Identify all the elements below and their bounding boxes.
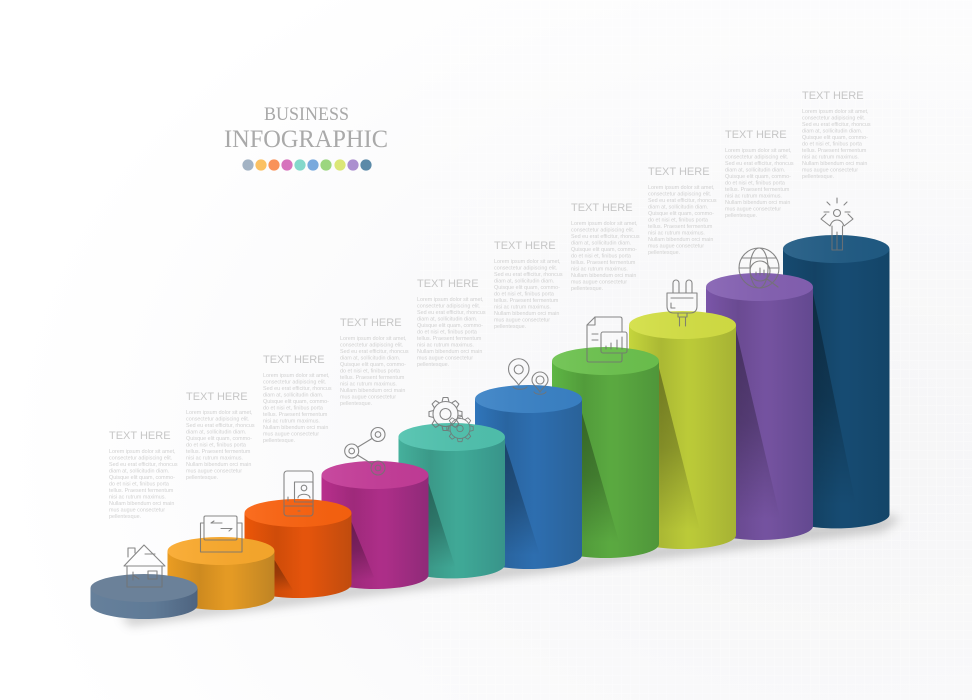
text block 1: mus augue consectetur [109,508,165,514]
text block 9: consectetur adipiscing elit. [725,154,788,160]
text block 8 [648,166,717,256]
text block 7: mus augue consectetur [571,280,627,286]
text block 4: mus augue consectetur [340,394,396,400]
text block 8: Lorem ipsum dolor sit amet, [648,185,715,191]
text block 10: nisi ac rutrum maximus. [802,154,859,160]
text block 1 [109,430,178,520]
text block 2 [186,391,255,481]
text block 4: TEXT HERE [340,317,402,329]
icon: globe with magnifier [739,248,779,288]
text block 2: Sed eu erat efficitur, rhoncus [186,423,255,429]
text block 7 [571,202,640,292]
text block 2: diam at, sollicitudin diam. [186,430,246,436]
ground shadow [120,515,901,626]
text block 4: consectetur adipiscing elit. [340,342,403,348]
text block 6: tellus. Praesent fermentum [494,298,559,304]
text block 2: TEXT HERE [186,391,248,403]
text block 8: Quisque elit quam, commo- [648,211,714,217]
text block 10: TEXT HERE [802,90,864,102]
title: business infographic: BUSINESS [264,105,349,125]
text block 4: pellentesque. [340,401,372,407]
text block 8: mus augue consectetur [648,244,704,250]
text block 7: Lorem ipsum dolor sit amet, [571,221,638,227]
text block 10: Lorem ipsum dolor sit amet, [802,109,869,115]
icon: document chart [587,317,627,362]
text block 7: TEXT HERE [571,202,633,214]
title: business infographic [224,105,388,153]
text block 3: pellentesque. [263,438,295,444]
text block 9: mus augue consectetur [725,206,781,212]
text block 5: nisi ac rutrum maximus. [417,342,474,348]
text block 4 [340,317,409,407]
text block 5: Lorem ipsum dolor sit amet, [417,297,484,303]
text block 3: nisi ac rutrum maximus. [263,418,320,424]
text block 9: pellentesque. [725,213,757,219]
text block 5: Quisque elit quam, commo- [417,323,483,329]
text block 5: do et nisi et, finibus porta [417,330,477,336]
text block 4: Lorem ipsum dolor sit amet, [340,336,407,342]
text block 2: tellus. Praesent fermentum [186,449,251,455]
cylinder 10: navy [783,235,890,528]
text block 2: Quisque elit quam, commo- [186,436,252,442]
text block 6: Nullam bibendum orci main [494,311,559,317]
text block 10: do et nisi et, finibus porta [802,142,862,148]
icon: map pins [508,359,548,394]
text block 2: pellentesque. [186,475,218,481]
text block 9: diam at, sollicitudin diam. [725,168,785,174]
cylinder 8: lime [629,311,736,549]
text block 5: consectetur adipiscing elit. [417,304,480,310]
text block 2: do et nisi et, finibus porta [186,442,246,448]
text block 7: diam at, sollicitudin diam. [571,240,631,246]
text block 1: consectetur adipiscing elit. [109,456,172,462]
text block 9 [725,129,794,219]
cylinder 6: blue [475,385,582,569]
text block 9: Nullam bibendum orci main [725,200,790,206]
text block 4: Quisque elit quam, commo- [340,362,406,368]
text block 3: Lorem ipsum dolor sit amet, [263,373,330,379]
text block 10 [802,90,871,180]
text block 8: TEXT HERE [648,166,710,178]
text block 7: do et nisi et, finibus porta [571,254,631,260]
text block 7: consectetur adipiscing elit. [571,228,634,234]
text block 4: tellus. Praesent fermentum [340,375,405,381]
text block 3 [263,354,332,444]
text block 7: Sed eu erat efficitur, rhoncus [571,234,640,240]
text block 1: nisi ac rutrum maximus. [109,494,166,500]
text block 4: do et nisi et, finibus porta [340,368,400,374]
text block 5: Sed eu erat efficitur, rhoncus [417,310,486,316]
text block 10: Nullam bibendum orci main [802,161,867,167]
text block 2: mus augue consectetur [186,468,242,474]
text block 8: Nullam bibendum orci main [648,237,713,243]
text block 3: Nullam bibendum orci main [263,425,328,431]
text block 10: diam at, sollicitudin diam. [802,128,862,134]
text block 10: consectetur adipiscing elit. [802,116,865,122]
cylinder 3: orange [244,499,352,598]
text block 1: tellus. Praesent fermentum [109,488,174,494]
text block 3: consectetur adipiscing elit. [263,380,326,386]
text block 8: Sed eu erat efficitur, rhoncus [648,198,717,204]
icon: gears [429,398,473,442]
text block 10: Sed eu erat efficitur, rhoncus [802,122,871,128]
text block 5: mus augue consectetur [417,356,473,362]
text block 7: nisi ac rutrum maximus. [571,266,628,272]
text block 6: nisi ac rutrum maximus. [494,304,551,310]
text block 9: tellus. Praesent fermentum [725,187,790,193]
icon: house [124,545,165,587]
text block 2: consectetur adipiscing elit. [186,416,249,422]
text block 7: tellus. Praesent fermentum [571,260,636,266]
text block 1: Quisque elit quam, commo- [109,475,175,481]
text block 7: Quisque elit quam, commo- [571,247,637,253]
text block 5: Nullam bibendum orci main [417,349,482,355]
text block 1: Nullam bibendum orci main [109,501,174,507]
cylinder 1: slate [90,574,198,619]
text block 6: mus augue consectetur [494,318,550,324]
text block 8: tellus. Praesent fermentum [648,224,713,230]
text block 6 [494,240,563,330]
text block 8: pellentesque. [648,250,680,256]
text block 1: Sed eu erat efficitur, rhoncus [109,462,178,468]
text block 1: do et nisi et, finibus porta [109,482,169,488]
text block 4: diam at, sollicitudin diam. [340,356,400,362]
text block 4: Nullam bibendum orci main [340,388,405,394]
cylinder 7: green [552,347,659,558]
text block 6: Sed eu erat efficitur, rhoncus [494,272,563,278]
text block 5: TEXT HERE [417,278,479,290]
text block 5: tellus. Praesent fermentum [417,336,482,342]
text block 2: nisi ac rutrum maximus. [186,456,243,462]
text block 10: mus augue consectetur [802,168,858,174]
text block 6: diam at, sollicitudin diam. [494,278,554,284]
text block 6: pellentesque. [494,324,526,330]
icon: plug [667,280,697,326]
text block 4: nisi ac rutrum maximus. [340,382,397,388]
icon: cards with arrows [200,516,242,552]
colour dots [242,159,372,171]
text block 5: pellentesque. [417,362,449,368]
text block 10: tellus. Praesent fermentum [802,148,867,154]
text block 9: Quisque elit quam, commo- [725,174,791,180]
text block 4: Sed eu erat efficitur, rhoncus [340,349,409,355]
text block 6: do et nisi et, finibus porta [494,292,554,298]
cylinder 2: amber [168,537,274,610]
text block 6: consectetur adipiscing elit. [494,266,557,272]
text block 9: Sed eu erat efficitur, rhoncus [725,161,794,167]
text block 3: Quisque elit quam, commo- [263,399,329,405]
text block 6: TEXT HERE [494,240,556,252]
text block 3: Sed eu erat efficitur, rhoncus [263,386,332,392]
text block 8: consectetur adipiscing elit. [648,192,711,198]
text block 2: Lorem ipsum dolor sit amet, [186,410,253,416]
text block 3: TEXT HERE [263,354,325,366]
icon: share nodes [345,428,385,475]
text block 1: diam at, sollicitudin diam. [109,468,169,474]
text block 10: Quisque elit quam, commo- [802,135,868,141]
text block 6: Lorem ipsum dolor sit amet, [494,259,561,265]
text block 8: diam at, sollicitudin diam. [648,204,708,210]
text block 8: do et nisi et, finibus porta [648,218,708,224]
icon: phone profile [284,471,313,516]
cylinder 9: purple [706,273,813,540]
text block 7: pellentesque. [571,286,603,292]
text block 6: Quisque elit quam, commo- [494,285,560,291]
icon: person with raised arms [821,198,853,250]
text block 5 [417,278,486,368]
text block 1: TEXT HERE [109,430,171,442]
text block 8: nisi ac rutrum maximus. [648,230,705,236]
text block 1: Lorem ipsum dolor sit amet, [109,449,176,455]
text block 1: pellentesque. [109,514,141,520]
cylinder 4: magenta [322,461,428,589]
text block 2: Nullam bibendum orci main [186,462,251,468]
cylinder 5: teal [398,423,505,578]
text block 9: TEXT HERE [725,129,787,141]
text block 9: Lorem ipsum dolor sit amet, [725,148,792,154]
text block 10: pellentesque. [802,174,834,180]
text block 9: do et nisi et, finibus porta [725,180,785,186]
text block 3: diam at, sollicitudin diam. [263,392,323,398]
text block 3: do et nisi et, finibus porta [263,406,323,412]
text block 7: Nullam bibendum orci main [571,273,636,279]
text block 3: tellus. Praesent fermentum [263,412,328,418]
text block 5: diam at, sollicitudin diam. [417,316,477,322]
text block 9: nisi ac rutrum maximus. [725,194,782,200]
title: business infographic: INFOGRAPHIC [224,126,388,153]
text block 3: mus augue consectetur [263,432,319,438]
